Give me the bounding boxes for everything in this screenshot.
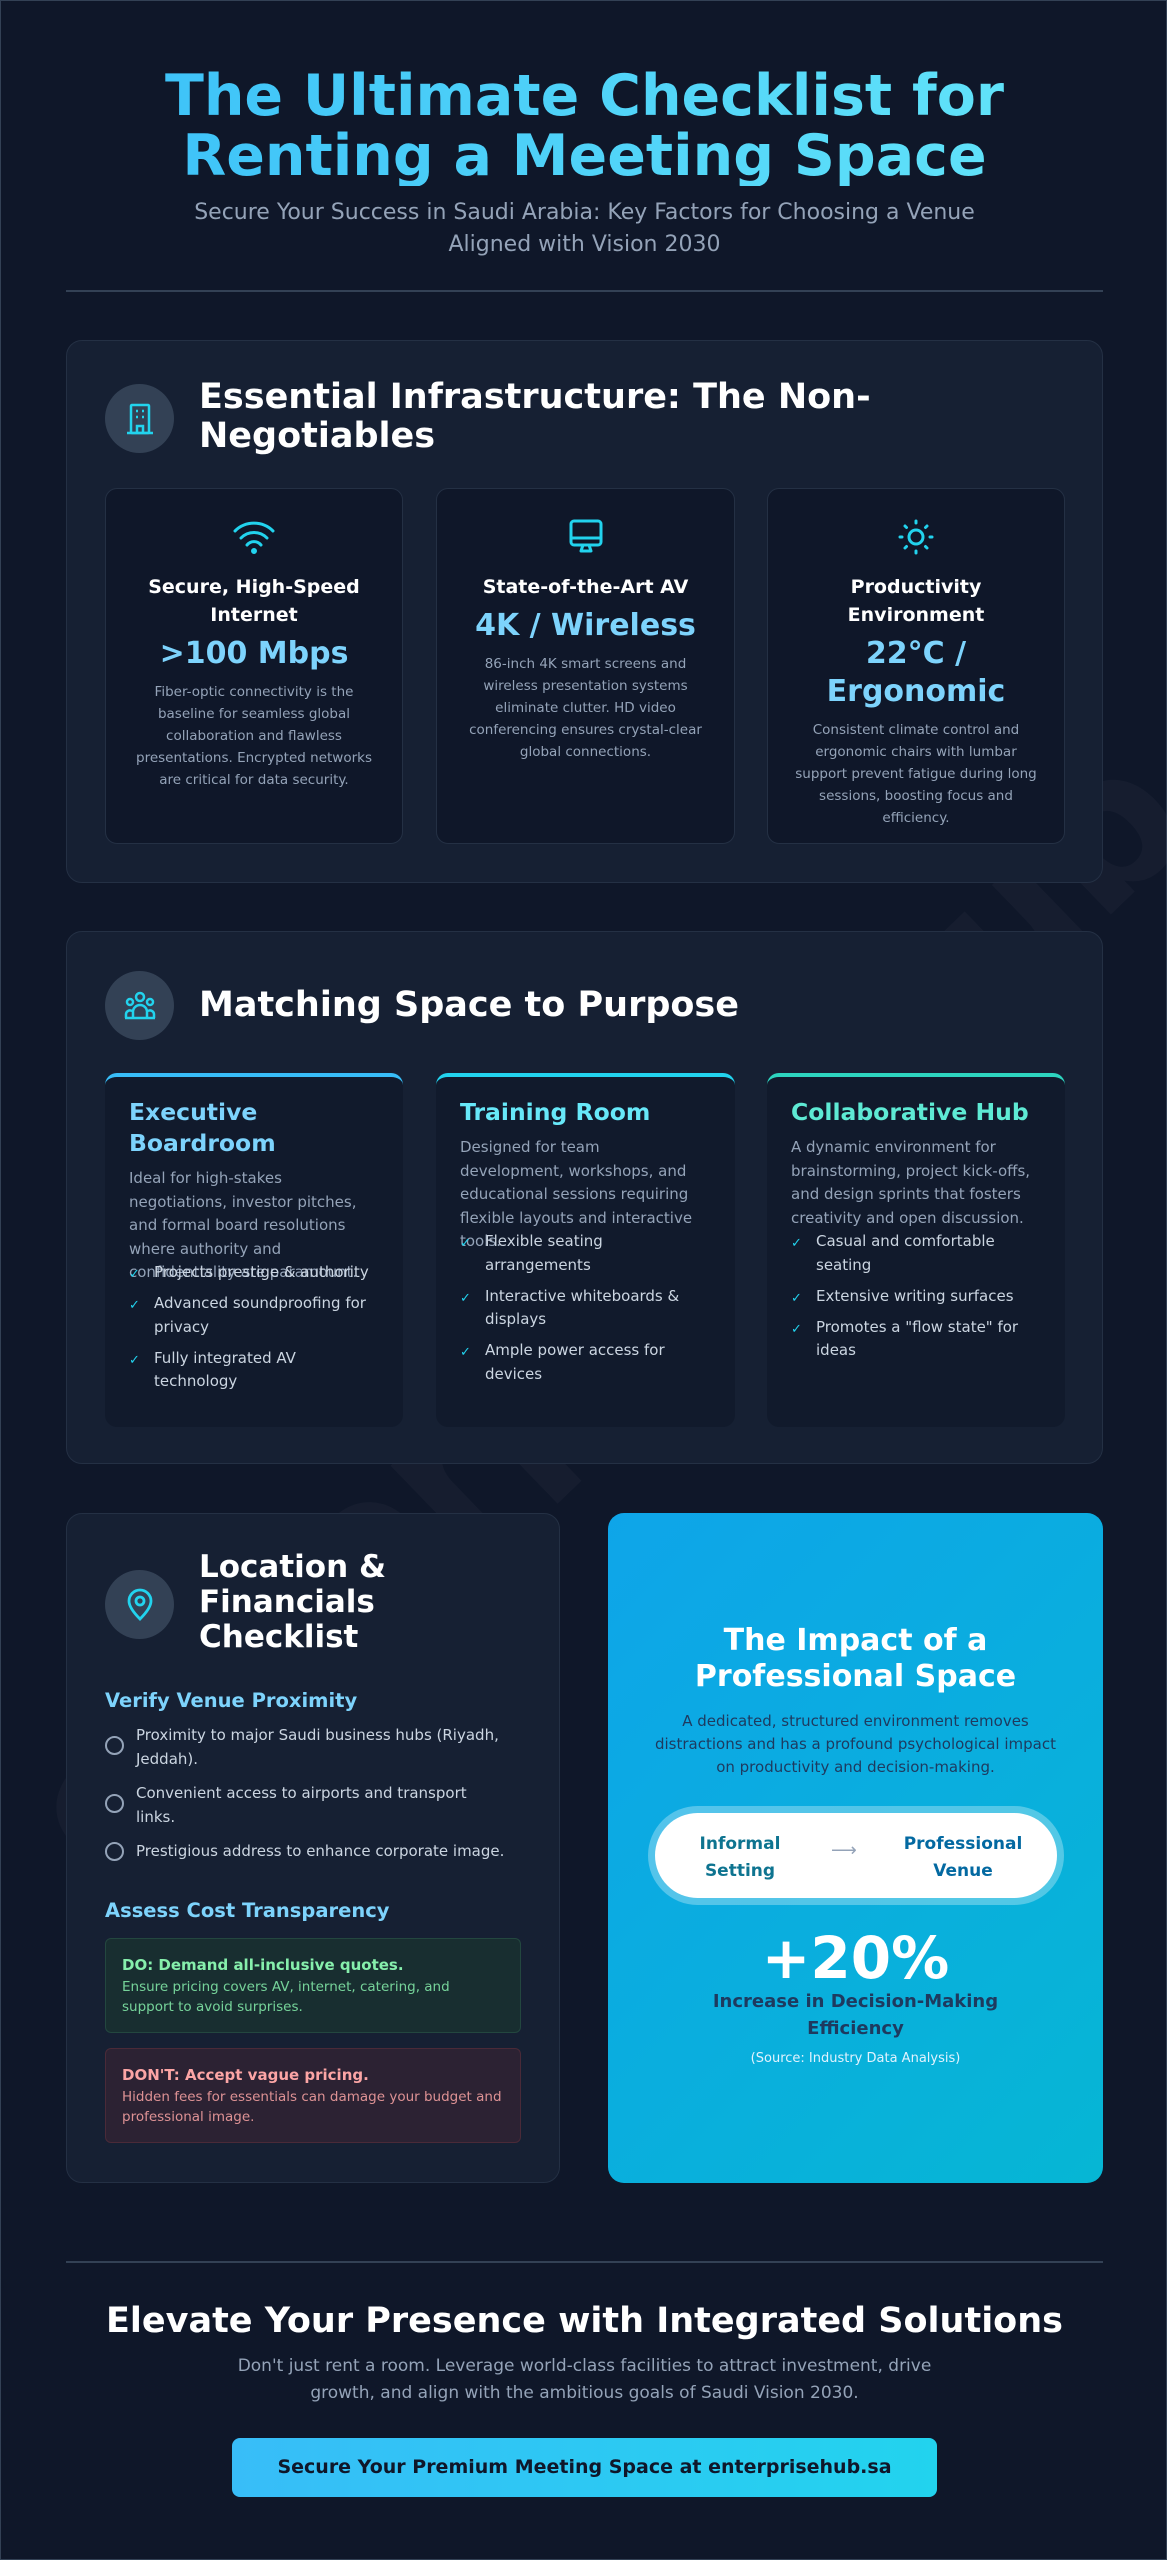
card: internet: >100 Mbps (160, 636, 348, 671)
title (1, 66, 1167, 186)
stat: +20% (762, 1924, 949, 1992)
card: executive boardroom (105, 1073, 403, 1427)
stat label (713, 1991, 998, 2039)
comparison pill: Professional (904, 1834, 1022, 1854)
footer text: growth, and align with the ambitious goals of Saudi Vision 2030. (310, 2383, 859, 2403)
card: collaborative hub: Collaborative Hub (791, 1098, 1029, 1126)
subtitle: Aligned with Vision 2030 (448, 232, 720, 257)
callout: don't: DON'T: Accept vague pricing. (122, 2066, 369, 2084)
card: environment: Consistent climate control and ergonomic chairs with lumbar support prevent fatigue during long sessions, boosting focus and efficiency. (795, 722, 1037, 826)
footer heading: Elevate Your Presence with Integrated Solutions (106, 2301, 1063, 2341)
card: AV (436, 488, 735, 844)
card: collaborative hub (767, 1073, 1065, 1427)
card: training room: Training Room (460, 1098, 650, 1126)
footer text (238, 2356, 931, 2403)
card: internet: Secure, High-Speed (148, 576, 360, 598)
callout: don't (105, 2048, 521, 2143)
card: executive boardroom: Ideal for high-stakes negotiations, investor pitches, and formal board resolutions where authority and confidentiality are paramount. (129, 1169, 357, 1281)
comparison pill: Setting (705, 1861, 775, 1881)
card: AV: 4K / Wireless (475, 608, 696, 643)
card: training room: Ample power access for devices (485, 1341, 665, 1382)
checklist: proximity: Proximity to major Saudi business hubs (Riyadh, Jeddah). (136, 1726, 499, 1768)
card: environment (767, 488, 1065, 844)
card: training room: Flexible seating arrangements (485, 1232, 603, 1274)
panel: impact (608, 1513, 1103, 2183)
panel: location & financials (66, 1513, 560, 2183)
callout: do: DO: Demand all-inclusive quotes. (122, 1956, 404, 1974)
title: The Ultimate Checklist for (165, 63, 1004, 129)
heading: Essential Infrastructure: The Non- (199, 377, 871, 417)
checklist: proximity: Prestigious address to enhance corporate image. (136, 1842, 504, 1860)
icon: people (105, 971, 174, 1040)
icon: wifi (233, 522, 275, 554)
stat label: Increase in Decision-Making (713, 1991, 998, 2012)
card: executive boardroom: Advanced soundproofing for privacy (154, 1294, 366, 1336)
card: collaborative hub: Casual and comfortable seating (816, 1232, 995, 1274)
heading: Matching Space to Purpose (199, 985, 739, 1025)
card: executive boardroom: Projects prestige & authority (154, 1263, 369, 1281)
card: environment: Ergonomic (827, 674, 1005, 709)
heading: Location & (199, 1549, 386, 1585)
card: environment: 22°C / (866, 636, 966, 671)
callout: do: Ensure pricing covers AV, internet, catering, and support to avoid surprises. (122, 1979, 450, 2015)
footer text: Don't just rent a room. Leverage world-class facilities to attract investment, drive (238, 2356, 931, 2376)
heading: The Impact of a (724, 1623, 987, 1658)
heading (199, 1549, 386, 1655)
subheading: proximity: Verify Venue Proximity (105, 1689, 357, 1712)
comparison pill: Venue (933, 1861, 993, 1881)
card: AV: 86-inch 4K smart screens and wireless presentation systems eliminate clutter. HD video conferencing ensures crystal-clear global connections. (469, 656, 702, 760)
source: (Source: Industry Data Analysis) (751, 2051, 960, 2066)
panel: matching space (66, 931, 1103, 1464)
subtitle: Secure Your Success in Saudi Arabia: Key Factors for Choosing a Venue (194, 200, 975, 225)
heading: Financials (199, 1584, 375, 1620)
icon: location pin (105, 1570, 174, 1639)
card: collaborative hub: Extensive writing surfaces (816, 1286, 1014, 1304)
card: executive boardroom: Boardroom (129, 1129, 276, 1157)
callout: do (105, 1938, 521, 2033)
heading: Professional Space (695, 1659, 1016, 1694)
card: executive boardroom: Fully integrated AV technology (154, 1348, 296, 1390)
icon: building (105, 384, 174, 453)
panel: essential infrastructure (66, 340, 1103, 883)
arrow: ⟶ (831, 1840, 857, 1861)
card: internet: Internet (210, 604, 298, 626)
icon: sun (898, 520, 934, 554)
subtitle (194, 200, 975, 257)
card: training room: Designed for team development, workshops, and educational sessions requiring flexible layouts and interactive tools. (460, 1138, 692, 1250)
stat label: Efficiency (807, 2018, 904, 2039)
icon: monitor (570, 520, 602, 552)
cta button (232, 2438, 937, 2497)
card: collaborative hub: A dynamic environment for brainstorming, project kick-offs, and design sprints that fosters creativity and open discussion. (791, 1138, 1030, 1226)
checklist: proximity (105, 1726, 504, 1861)
card: environment: Productivity (851, 576, 981, 598)
cta button: Secure Your Premium Meeting Space at enterprisehub.sa (277, 2456, 892, 2478)
card: training room (436, 1073, 735, 1427)
callout: don't: Hidden fees for essentials can damage your budget and professional image. (122, 2089, 502, 2125)
card: collaborative hub: Promotes a "flow state" for ideas (816, 1318, 1018, 1359)
card: training room: Interactive whiteboards & displays (485, 1286, 679, 1328)
heading (695, 1623, 1016, 1694)
title: Renting a Meeting Space (182, 123, 987, 189)
card: environment: Environment (848, 604, 984, 626)
heading (199, 377, 871, 456)
card: internet (105, 488, 403, 844)
comparison pill (648, 1806, 1064, 1905)
heading: Negotiables (199, 416, 435, 456)
heading: Checklist (199, 1619, 358, 1655)
comparison pill: Informal (700, 1834, 780, 1854)
card: internet: Fiber-optic connectivity is the baseline for seamless global collaboration and flawless presentations. Encrypted networks are critical for data security. (136, 684, 372, 788)
subheading: cost: Assess Cost Transparency (105, 1899, 390, 1922)
checklist: proximity: Convenient access to airports and transport links. (136, 1784, 467, 1826)
card: AV: State-of-the-Art AV (483, 576, 688, 598)
text block: A dedicated, structured environment removes distractions and has a profound psychological impact on productivity and decision-making. (655, 1712, 1056, 1776)
card: executive boardroom: Executive (129, 1098, 257, 1126)
